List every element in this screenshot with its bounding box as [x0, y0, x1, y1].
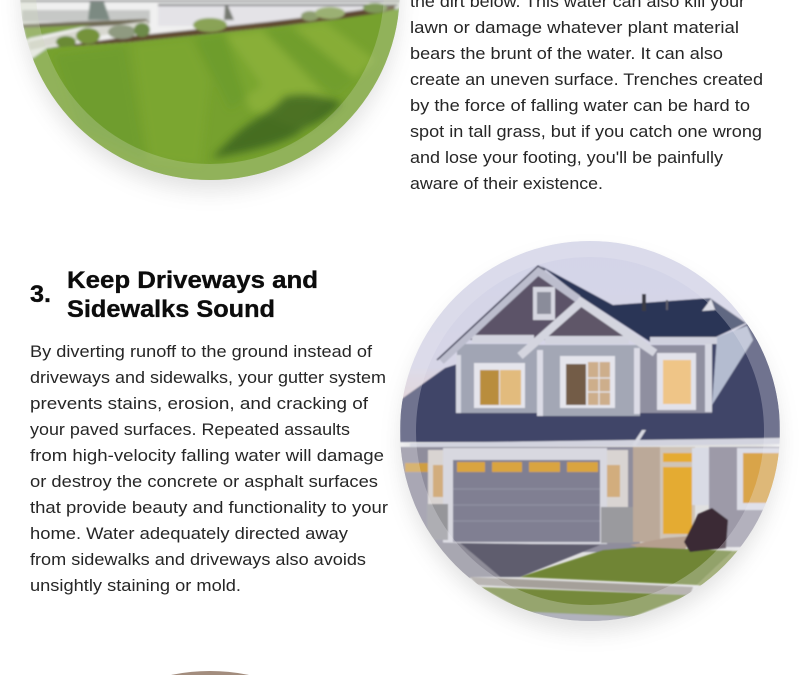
body text: lawn damage paragraph: spot in tall grass, but if you catch one wrong: [410, 122, 762, 141]
windows: [474, 363, 525, 408]
shrubs: [56, 36, 76, 48]
heading: Keep Driveways and Sidewalks Sound: Keep Driveways and: [67, 267, 318, 294]
right wall: [640, 345, 712, 413]
heading number 3: 3.: [30, 281, 51, 308]
body text: driveways paragraph: [30, 342, 388, 595]
columns: [691, 448, 696, 506]
body text: driveways paragraph: driveways and sidewalks, your gutter system: [30, 368, 386, 387]
eave: [410, 438, 780, 448]
porch step: [630, 536, 692, 550]
left gable fill: [470, 274, 580, 340]
stone bases: [433, 503, 449, 540]
photo: house at dusk in circle: [400, 240, 780, 631]
body text: lawn damage paragraph: [410, 0, 763, 193]
photo: next circle peeking at bottom edge: [172, 671, 248, 675]
garage door: [443, 448, 607, 544]
roof vents: [642, 294, 646, 311]
body text: driveways paragraph: prevents stains, erosion, and cracking of: [30, 394, 368, 413]
body text: lawn damage paragraph: lawn or damage whatever plant material: [410, 18, 739, 37]
body text: lawn damage paragraph: by the force of falling water can be hard to: [410, 96, 750, 115]
left dormer wall: [457, 344, 539, 413]
centre gable fill: [548, 306, 624, 337]
body text: driveways paragraph: home. Water adequately directed away: [30, 524, 349, 543]
upper right roof: [541, 266, 746, 342]
body text: lawn damage paragraph: aware of their existence.: [410, 174, 603, 193]
centre gable trim: [520, 302, 655, 356]
lower walls: [400, 447, 640, 552]
body text: driveways paragraph: By diverting runoff to the ground instead of: [30, 342, 372, 361]
sky: [403, 241, 746, 398]
body text: lawn damage paragraph: and lose your footing, you'll be painfully: [410, 148, 724, 167]
right window: [737, 448, 780, 510]
tree shadow: [212, 95, 342, 158]
body text: driveways paragraph: unsightly staining or mold.: [30, 576, 241, 595]
driveway: [460, 543, 600, 577]
body text: lawn damage paragraph: bears the brunt of the water. It can also: [410, 44, 723, 63]
heading: Keep Driveways and Sidewalks Sound: [67, 267, 318, 323]
body text: driveways paragraph: from sidewalks and driveways also avoids: [30, 550, 366, 569]
mulch bed: [47, 5, 395, 48]
door: [663, 453, 692, 462]
garden path: [28, 21, 150, 50]
lawn and walk: [520, 547, 733, 585]
mowing stripes: [205, 20, 370, 114]
lower main roof: [400, 322, 780, 442]
body text: driveways paragraph: your paved surfaces. Repeated assaults: [30, 420, 350, 439]
left gable trim: [441, 271, 578, 361]
heading: Keep Driveways and Sidewalks Sound: Sidewalks Sound: [67, 296, 275, 323]
small far lawn: [23, 25, 92, 40]
photo: striped lawn in circle: [0, 0, 420, 190]
body text: lawn damage paragraph: create an uneven surface. Trenches created: [410, 70, 763, 89]
body text: driveways paragraph: from high-velocity falling water will damage: [30, 446, 384, 465]
grass: [20, 8, 400, 190]
body text: driveways paragraph: that provide beauty and functionality to your: [30, 498, 388, 517]
shrub: [684, 508, 728, 552]
centre wall: [538, 345, 640, 416]
side siding: [712, 326, 753, 405]
vent: [533, 287, 555, 320]
body text: driveways paragraph: or destroy the concrete or asphalt surfaces: [30, 472, 378, 491]
